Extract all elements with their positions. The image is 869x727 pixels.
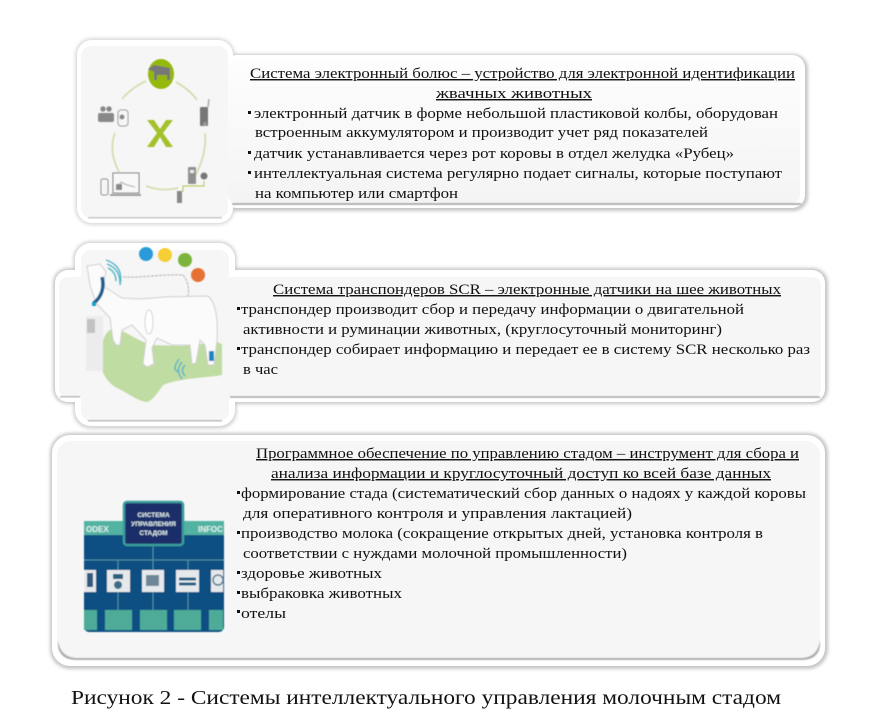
back cow outline (123, 275, 188, 296)
text: bolus bullets: на компьютер или смартфон (255, 186, 458, 202)
icon: cow in green circle (148, 59, 174, 89)
pedometer (209, 351, 214, 361)
diagram title box: СТАДОМ (139, 530, 168, 537)
text: bolus bullets: электронный датчик в форме небольшой пластиковой колбы, оборудован (254, 106, 778, 122)
front cow (87, 264, 217, 367)
icon: lifecycle ring with sensors (98, 59, 209, 203)
panel 2 card (53, 241, 828, 429)
text: software heading (256, 446, 799, 482)
panel 1 card (75, 38, 808, 225)
green label row (84, 610, 223, 630)
cow patch (145, 310, 153, 334)
text: bolus bullets: встроенным аккумулятором и производит учет ряд показателей (255, 125, 708, 141)
text: SCR bullets: транспондер собирает информацию и передает ее в систему SCR несколько раз (241, 342, 810, 358)
collar (94, 277, 103, 303)
text: bolus heading: жвачных животных (435, 86, 593, 102)
text: software bullets (237, 486, 806, 622)
diagram label: right tab: INFOC (198, 525, 223, 534)
panel: herd management software (50, 433, 828, 669)
text: SCR bullets: в час (243, 362, 278, 378)
diagram: herd management system (84, 502, 224, 632)
panel: SCR transponder system (53, 241, 828, 429)
text: SCR heading: Система транспондеров SCR – электронные датчики на шее животных (273, 282, 782, 298)
text: bolus heading (250, 66, 795, 102)
text: software bullets: выбраковка животных (241, 586, 403, 602)
diagram title box: СИСТЕМА (137, 512, 170, 519)
text: SCR bullets: активности и руминации животных, (круглосуточный мониторинг) (243, 322, 722, 338)
text: bolus bullets: датчик устанавливается через рот коровы в отдел желудка «Рубец» (254, 146, 734, 162)
text: bolus heading: Система электронный болюс – устройство для электронной идентификации (250, 66, 795, 82)
text: software heading: Программное обеспечение по управлению стадом – инструмент для сбора и (256, 446, 799, 462)
illustration: cows with collar and pedometer sensors (86, 247, 222, 402)
text: software bullets: здоровье животных (241, 566, 383, 582)
wireless arcs (106, 260, 185, 379)
icon: central X logo (147, 120, 173, 147)
text: software bullets: отелы (241, 606, 286, 622)
text: bolus bullets (248, 106, 783, 202)
collar tag (92, 302, 96, 306)
text: bolus bullets: интеллектуальная система регулярно подает сигналы, которые поступают (254, 166, 783, 182)
ring arrows (112, 81, 205, 190)
icon tiles row (84, 570, 223, 592)
text: software bullets: соответствии с нуждами молочной промышленности) (243, 546, 627, 562)
diagram title box: УПРАВЛЕНИЯ (131, 521, 176, 528)
diagram title box (124, 502, 183, 545)
text: software bullets: для оперативного контроля и управления лактацией) (243, 506, 632, 522)
panel: electronic bolus system (75, 38, 808, 225)
caption: Рисунок 2 - Системы интеллектуального управления молочным стадом (71, 687, 781, 709)
text: SCR bullets: транспондер производит сбор и передачу информации о двигательной (241, 302, 744, 318)
text: software heading: анализа информации и круглосуточный доступ ко всей базе данных (271, 466, 772, 482)
status dots (139, 247, 153, 261)
text: software bullets: производство молока (сокращение открытых дней, установка контроля в (241, 526, 763, 542)
icon: people with phone (98, 106, 128, 126)
icon: bolus device (200, 99, 209, 126)
pasture (100, 329, 222, 402)
panel 3 card (50, 433, 828, 669)
side sheet (86, 316, 103, 371)
text: software bullets: формирование стада (систематический сбор данных о надоях у каждой коровы (241, 486, 806, 502)
icon: computer tower and cloud (177, 167, 208, 203)
icon: laptop and phone (101, 173, 141, 195)
diagram label: left tab: ODEX (86, 525, 109, 534)
text: SCR bullets (237, 302, 810, 378)
